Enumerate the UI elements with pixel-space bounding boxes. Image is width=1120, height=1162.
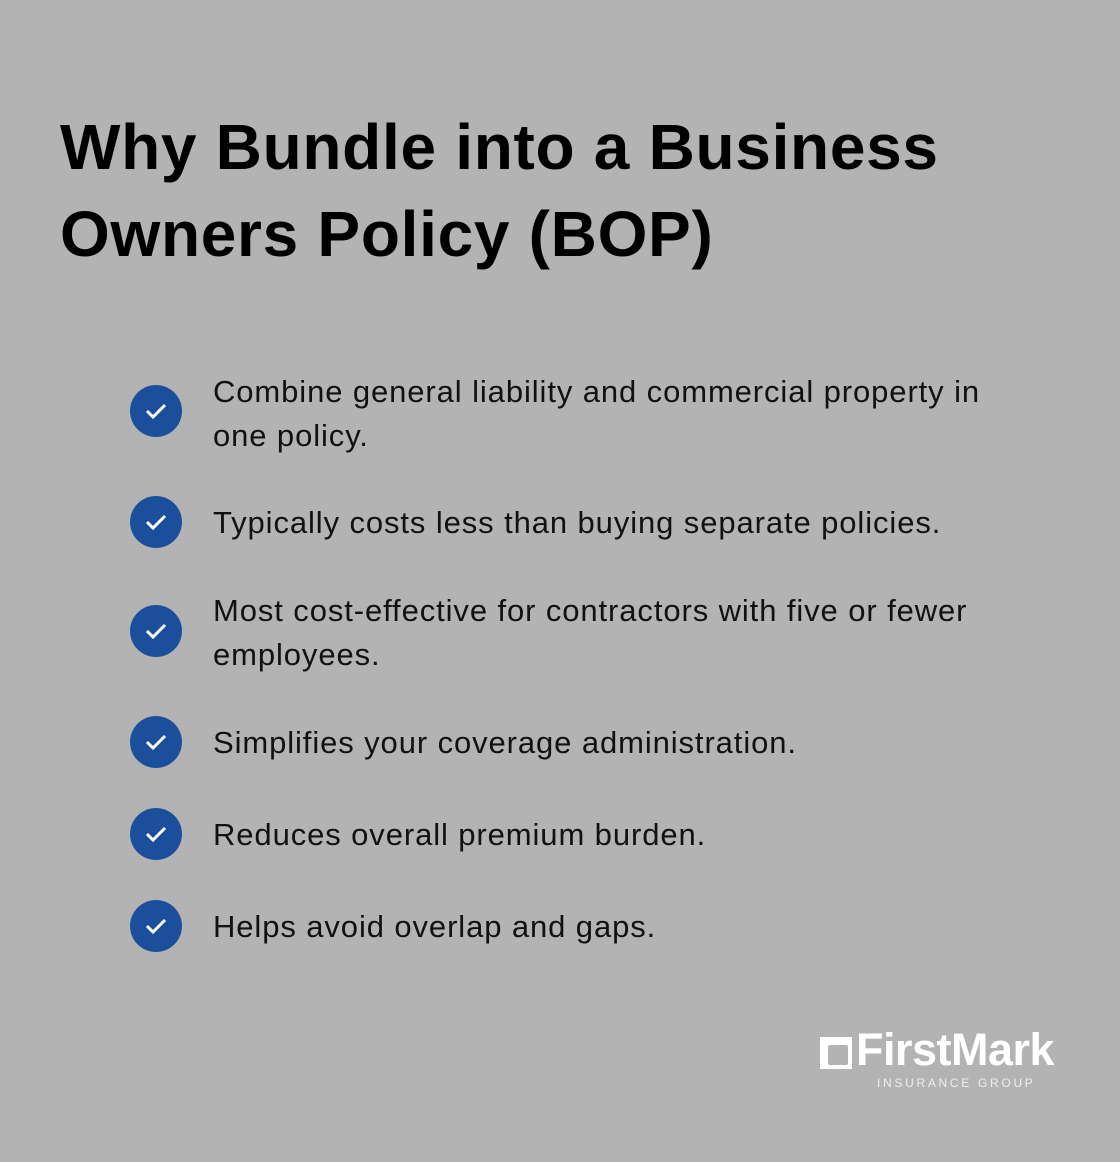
item 4: Simplifies your coverage administration. [213, 725, 797, 760]
item 2 [130, 496, 941, 548]
item 1: Combine general liability and commercial property in [213, 374, 980, 409]
item 1 [130, 374, 980, 453]
title: Why Bundle into a Business [60, 111, 939, 183]
item 6 [130, 900, 656, 952]
logo: INSURANCE GROUP [877, 1076, 1036, 1090]
item 3: Most cost-effective for contractors with five or fewer [213, 593, 967, 628]
title [60, 111, 939, 270]
item 6: Helps avoid overlap and gaps. [213, 909, 656, 944]
item 3: employees. [213, 637, 381, 672]
item 2: Typically costs less than buying separate policies. [213, 505, 941, 540]
icon: check [130, 900, 182, 952]
item 5 [130, 808, 706, 860]
icon: check [130, 605, 182, 657]
item 1: one policy. [213, 418, 369, 453]
logo [820, 1024, 1054, 1090]
logo: FirstMark [856, 1024, 1054, 1075]
icon: check [130, 808, 182, 860]
item 4 [130, 716, 797, 768]
item 5: Reduces overall premium burden. [213, 817, 706, 852]
title: Owners Policy (BOP) [60, 198, 713, 270]
item 3 [130, 593, 967, 672]
icon: check [130, 716, 182, 768]
icon: check [130, 385, 182, 437]
icon: check [130, 496, 182, 548]
